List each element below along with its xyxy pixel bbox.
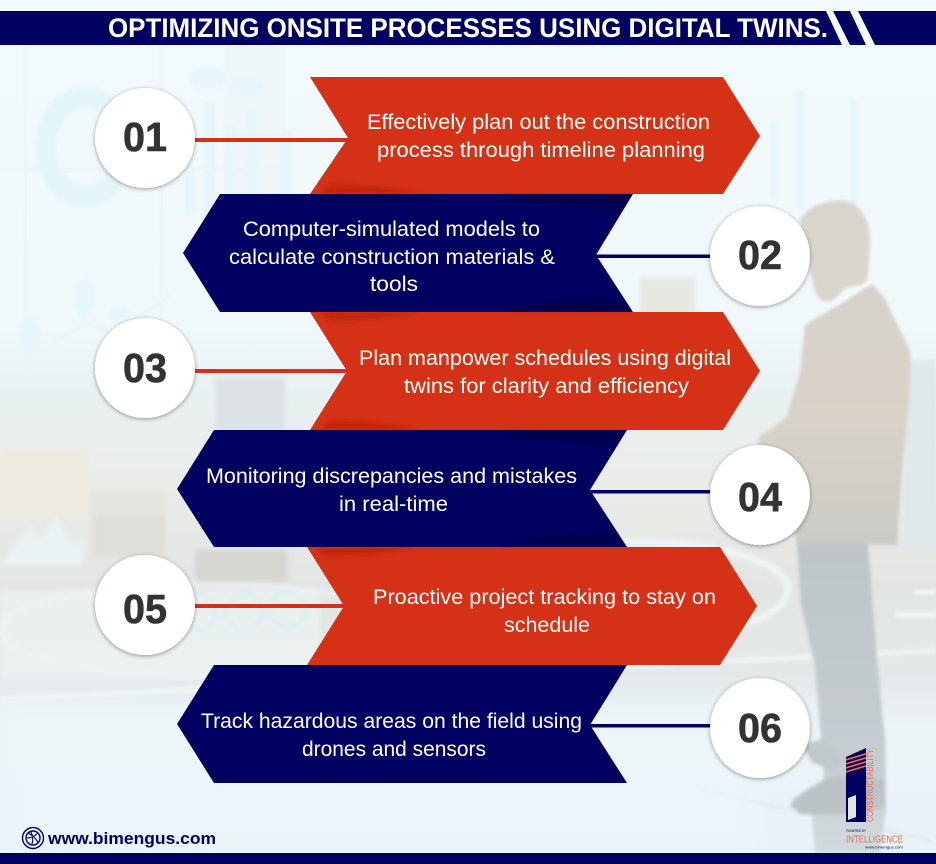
step 05 text: Proactive project tracking to stay on <box>373 585 716 609</box>
man jacket <box>758 284 910 545</box>
step 01 badge <box>95 88 195 188</box>
logo: Constructability <box>846 748 904 850</box>
logo url: www.bimengus.com <box>865 844 904 850</box>
step 04 connector <box>588 490 712 494</box>
website url: www.bimengus.com <box>47 829 216 848</box>
step 06 text: Track hazardous areas on the field using <box>201 709 582 733</box>
step 05 connector <box>195 604 347 608</box>
step 01 text: Effectively plan out the construction <box>367 110 710 134</box>
step 01 arrow <box>310 77 760 194</box>
step 03 connector <box>195 369 350 373</box>
background: floor glow <box>0 700 760 850</box>
title bar <box>0 11 936 45</box>
step 06 arrow <box>177 665 627 783</box>
step 04 badge <box>710 445 810 545</box>
step 02 badge <box>710 206 810 306</box>
step 05 <box>95 547 757 665</box>
background: window frames <box>0 45 290 375</box>
step 06 badge <box>710 678 810 778</box>
icon: dribbble globe <box>22 828 44 848</box>
step 05 badge <box>95 555 195 655</box>
step 05 text <box>373 585 716 637</box>
step 05 arrow <box>307 547 757 665</box>
step 02 badge: 02 <box>738 232 782 278</box>
man trousers <box>797 545 886 853</box>
step 01 text: process through timeline planning <box>377 138 705 162</box>
step 04 badge: 04 <box>738 474 782 520</box>
title slashes <box>826 11 875 45</box>
website footer <box>22 828 216 848</box>
step 04 text: Monitoring discrepancies and mistakes <box>206 464 577 488</box>
step 03 text: Plan manpower schedules using digital <box>359 346 731 370</box>
step 02 text: Computer-simulated models to <box>243 217 540 241</box>
step 05 text: schedule <box>504 613 590 637</box>
background: room right side <box>0 360 936 840</box>
step 06 connector <box>588 724 712 728</box>
step 03 text: twins for clarity and efficiency <box>404 374 689 398</box>
step 03 badge: 03 <box>123 345 167 391</box>
step 06 text: drones and sensors <box>302 737 486 761</box>
background: businessman <box>758 201 910 853</box>
logo powered by: POWERED BY <box>846 829 867 833</box>
step 03 badge <box>95 318 195 418</box>
step 01 <box>95 77 760 194</box>
step 05 badge: 05 <box>123 586 167 632</box>
man collar <box>835 281 871 305</box>
logo wordmark: CONSTRUCTABILITY <box>865 749 875 822</box>
step 06 text <box>201 709 582 761</box>
logo building <box>846 748 866 822</box>
step 06 badge: 06 <box>738 705 782 751</box>
step 02 connector <box>594 254 712 258</box>
step 02 text: tools <box>370 272 418 296</box>
background: digital chart hints <box>20 68 858 353</box>
step 04 text: in real-time <box>339 492 448 516</box>
step 03 <box>95 312 760 430</box>
step 01 connector <box>195 138 350 142</box>
step 01 text <box>367 110 710 162</box>
step 03 text <box>359 346 731 398</box>
fold shadows between arrows <box>318 181 628 560</box>
step 02 <box>183 194 810 312</box>
step 04 <box>177 430 810 547</box>
step 01 badge: 01 <box>123 114 167 160</box>
step 02 text <box>229 217 555 296</box>
step 02 arrow <box>183 194 633 312</box>
logo intelligence: INTELLIGENCE <box>846 834 903 846</box>
man head <box>800 201 870 301</box>
step 04 text <box>206 464 577 516</box>
title text: OPTIMIZING ONSITE PROCESSES USING DIGITAL TWINS. <box>108 13 828 43</box>
step 02 text: calculate construction materials & <box>229 245 555 269</box>
step 06 <box>177 665 810 783</box>
background: city model <box>0 278 788 680</box>
bottom bar <box>0 853 936 864</box>
step 04 arrow <box>177 430 627 547</box>
logo window <box>848 795 856 820</box>
step 03 arrow <box>310 312 760 430</box>
man shoes <box>790 775 885 815</box>
